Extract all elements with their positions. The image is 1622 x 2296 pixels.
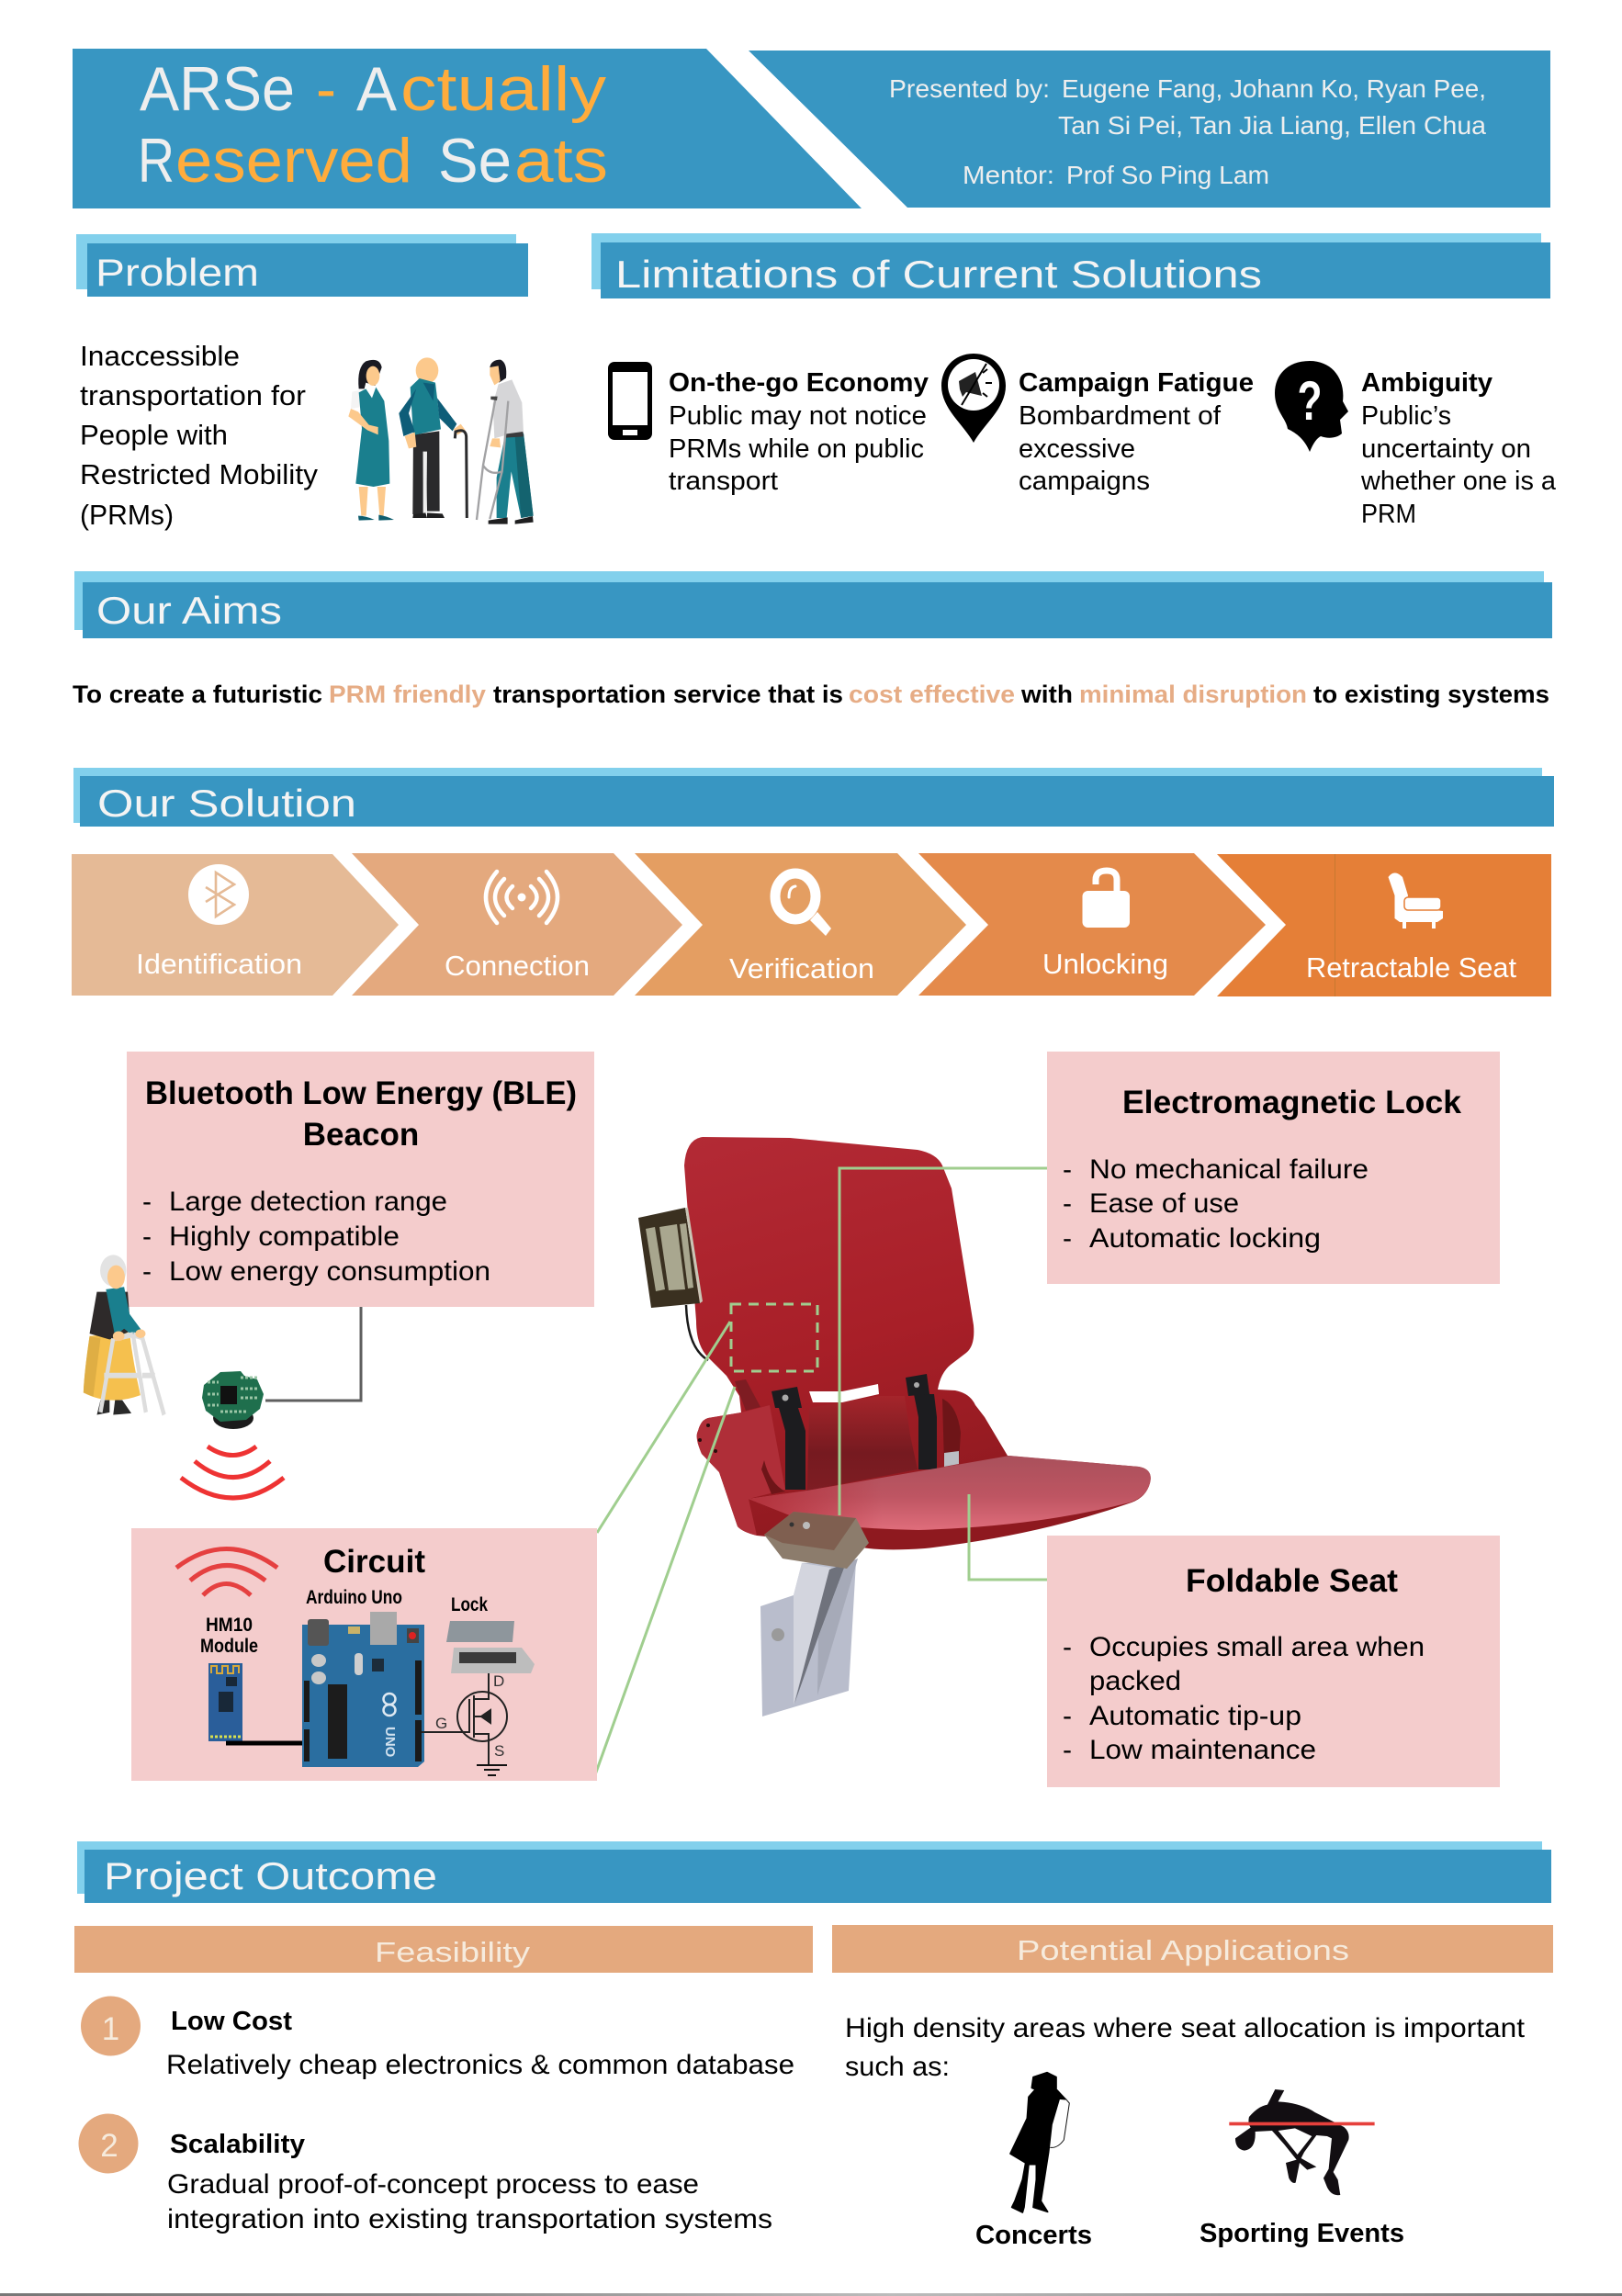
feasibility item: low cost: Relatively cheap electronics & common database: [166, 2050, 794, 2080]
heading: Limitations: [591, 233, 1550, 298]
MOSFET: S: [494, 1742, 504, 1760]
panel: electromagnetic lock: -: [1063, 1154, 1072, 1185]
feasibility item: low cost: Low Cost: [171, 2007, 292, 2036]
heading: Our Aims: [74, 571, 1552, 638]
subheading: Feasibility: Feasibility: [375, 1936, 531, 1968]
title: R: [138, 126, 175, 196]
title: Se: [438, 126, 512, 196]
heading: Our Aims: Our Aims: [96, 589, 282, 632]
labels: applications: Concerts: [975, 2221, 1092, 2250]
aims statement: with: [1020, 681, 1073, 708]
subheading: Potential Applications: [832, 1925, 1553, 1973]
step: identification: Identification: [136, 948, 302, 980]
presenters: [889, 74, 1486, 189]
panel: circuit: Module: [200, 1636, 258, 1657]
limitation: ambiguity: PRM: [1361, 500, 1416, 529]
Arduino Uno: UNO: [382, 1727, 398, 1758]
step: unlocking: Unlocking: [1042, 948, 1168, 980]
title: [138, 54, 608, 196]
panel: circuit: Lock: [451, 1594, 488, 1615]
limitation: on-the-go economy: On-the-go Economy: [669, 368, 929, 398]
aims statement: To create a futuristic: [73, 681, 322, 708]
seat pan: [749, 1456, 1151, 1530]
title: eserved: [175, 126, 412, 196]
lock hole dots: [698, 1424, 717, 1453]
panel: electromagnetic lock: No mechanical failure: [1089, 1154, 1369, 1185]
step: unlocking: [918, 853, 1266, 996]
panel: electromagnetic lock: Ease of use: [1089, 1188, 1239, 1219]
mounting block: [764, 1512, 869, 1569]
signal arcs: [176, 1548, 277, 1595]
title: ARSe: [140, 54, 295, 124]
icon: armchair: [1389, 872, 1443, 929]
subheading: Feasibility: [74, 1926, 813, 1973]
icon: concert singer: [1010, 2073, 1069, 2212]
panel: foldable seat: [1047, 1536, 1500, 1787]
panel: electromagnetic lock: Automatic locking: [1089, 1223, 1321, 1254]
limitation: campaign fatigue: [941, 354, 1254, 496]
icon: phone: [608, 362, 652, 440]
panel: foldable seat: packed: [1089, 1666, 1181, 1696]
leader lines: [593, 1168, 1047, 1780]
aims statement: minimal disruption: [1079, 681, 1307, 708]
panel: foldable seat: -: [1063, 1735, 1072, 1765]
panel: BLE beacon: Bluetooth Low Energy (BLE): [145, 1075, 577, 1111]
limitation: ambiguity: Public’s: [1361, 401, 1451, 431]
title: -: [316, 54, 336, 124]
step: retractable seat: Retractable Seat: [1306, 951, 1516, 984]
icon: broadcast waves: [486, 872, 558, 923]
panel: electromagnetic lock: -: [1063, 1188, 1072, 1219]
presenters: Eugene Fang, Johann Ko, Ryan Pee,: [1062, 74, 1486, 103]
feasibility item: scalability: [79, 2114, 772, 2234]
heading: Problem: [76, 234, 528, 297]
step: connection: [352, 853, 682, 996]
feasibility item: scalability: Gradual proof-of-concept process to ease: [167, 2169, 699, 2200]
feasibility item: scalability: Scalability: [170, 2130, 305, 2159]
MOSFET: [422, 1672, 507, 1775]
icon: high jumper: [1229, 2089, 1375, 2195]
aims statement: PRM friendly: [329, 681, 486, 708]
magnetic lock on seat back: [638, 1208, 708, 1360]
aims statement: transportation service that is: [493, 681, 843, 708]
labels: applications: [975, 2219, 1404, 2250]
applications text: [845, 2013, 1526, 2082]
heading: Limitations: Limitations of Current Solutions: [615, 253, 1262, 296]
icon: open padlock: [1082, 871, 1130, 928]
step: retractable seat: [1217, 854, 1551, 996]
MOSFET: G: [435, 1715, 447, 1732]
aims statement: to existing systems: [1313, 681, 1549, 708]
panel: circuit: [131, 1528, 597, 1781]
panel: electromagnetic lock: Electromagnetic Lock: [1122, 1085, 1462, 1120]
back recess: [807, 1396, 918, 1491]
limitation: on-the-go economy: transport: [669, 467, 778, 496]
icon: head with question mark: [1275, 361, 1348, 452]
applications text: High density areas where seat allocation is important: [845, 2013, 1526, 2043]
panel: foldable seat: Low maintenance: [1089, 1735, 1316, 1765]
Arduino Uno: [302, 1612, 424, 1767]
straps: [772, 1374, 937, 1490]
problem text: Restricted Mobility: [80, 458, 318, 490]
mounting bracket: [760, 1559, 858, 1716]
panel: BLE beacon: Large detection range: [169, 1187, 447, 1217]
heading: Our Solution: Our Solution: [97, 782, 356, 825]
problem text: People with: [80, 419, 228, 451]
labels: applications: Sporting Events: [1200, 2219, 1404, 2248]
step: connection: Connection: [445, 950, 590, 982]
limitation: campaign fatigue: campaigns: [1019, 467, 1150, 496]
heading: Problem: Problem: [96, 251, 259, 294]
limitation: on-the-go economy: Public may not notice: [669, 401, 927, 431]
panel: BLE beacon: -: [142, 1256, 152, 1287]
panel: BLE beacon: Low energy consumption: [169, 1256, 490, 1287]
problem text: [80, 340, 318, 531]
title: ctually: [400, 54, 606, 124]
seat illustration: [638, 1137, 1151, 1716]
MOSFET: D: [493, 1672, 504, 1690]
limitation: ambiguity: [1275, 361, 1557, 529]
step: verification: Verification: [729, 952, 874, 985]
feasibility item: scalability: 2: [100, 2128, 118, 2164]
presenters: Mentor:: [963, 161, 1054, 189]
limitation: ambiguity: whether one is a: [1360, 467, 1557, 496]
limitation: campaign fatigue: Bombardment of: [1019, 401, 1222, 431]
panel: circuit: HM10: [206, 1615, 253, 1636]
presenters: Presented by:: [889, 74, 1050, 103]
problem text: transportation for: [80, 379, 306, 411]
limitation: campaign fatigue: Campaign Fatigue: [1019, 368, 1254, 398]
problem text: (PRMs): [80, 499, 174, 531]
feasibility item: scalability: integration into existing transportation systems: [167, 2204, 772, 2234]
feasibility item: low cost: [81, 1997, 794, 2080]
seat shell: [684, 1137, 1151, 1549]
HM10 module: [208, 1663, 242, 1741]
electromagnetic lock: [446, 1621, 535, 1673]
heading: Project Outcome: [77, 1841, 1551, 1903]
panel: BLE beacon: Beacon: [303, 1117, 419, 1153]
slot: [809, 1384, 879, 1402]
limitation: on-the-go economy: [608, 362, 929, 496]
icon: bluetooth: [188, 864, 249, 925]
illustration: woman with walker: [84, 1255, 164, 1415]
icon: magnifier: [775, 873, 831, 936]
aims statement: cost effective: [849, 681, 1015, 708]
panel: foldable seat: -: [1063, 1632, 1072, 1662]
limitation: on-the-go economy: PRMs while on public: [669, 434, 924, 464]
aims statement: [73, 681, 1549, 708]
panel: foldable seat: Occupies small area when: [1089, 1632, 1425, 1662]
panel: foldable seat: Foldable Seat: [1186, 1563, 1398, 1599]
icon: map pin with muted megaphone: [941, 354, 1006, 443]
panel: foldable seat: -: [1063, 1701, 1072, 1731]
heading: Our Solution: [73, 768, 1554, 827]
panel: BLE beacon: [127, 1052, 594, 1307]
panel: circuit: Arduino Uno: [306, 1587, 402, 1608]
header banner: [73, 49, 1550, 208]
problem text: Inaccessible: [80, 340, 240, 372]
panel: circuit: Circuit: [323, 1544, 425, 1580]
panel: BLE beacon: Highly compatible: [169, 1221, 400, 1252]
presenters: Tan Si Pei, Tan Jia Liang, Ellen Chua: [1058, 111, 1486, 140]
step: identification: [72, 854, 399, 996]
panel: foldable seat: Automatic tip-up: [1089, 1701, 1301, 1731]
title: A: [356, 54, 398, 124]
feasibility item: low cost: 1: [102, 2011, 119, 2047]
title: ats: [514, 126, 608, 196]
beacon board and leader: [202, 1307, 361, 1429]
heading: Project Outcome: Project Outcome: [104, 1854, 437, 1897]
panel: BLE beacon: -: [142, 1187, 152, 1217]
illustration: people with restricted mobility: [348, 357, 534, 524]
panel: BLE beacon: -: [142, 1221, 152, 1252]
step: verification: [635, 853, 966, 996]
presenters: Prof So Ping Lam: [1066, 161, 1269, 189]
applications text: such as:: [845, 2052, 950, 2082]
lower shell tint: [697, 1405, 785, 1536]
limitation: campaign fatigue: excessive: [1019, 434, 1135, 464]
limitation: ambiguity: uncertainty on: [1361, 434, 1531, 464]
subheading: Potential Applications: Potential Applications: [1017, 1934, 1349, 1966]
panel: electromagnetic lock: -: [1063, 1223, 1072, 1254]
signal arcs: beacon: [181, 1446, 284, 1498]
panel: electromagnetic lock: [1047, 1052, 1500, 1284]
icon: head with question mark: ?: [1297, 370, 1323, 432]
limitation: ambiguity: Ambiguity: [1361, 368, 1492, 398]
